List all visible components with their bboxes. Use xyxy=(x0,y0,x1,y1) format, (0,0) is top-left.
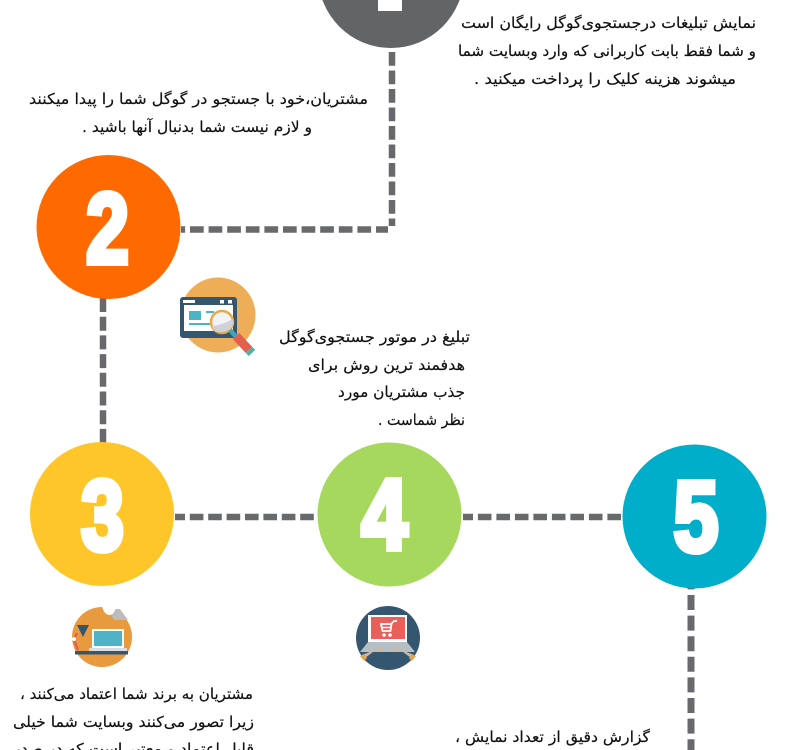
text: free ad display: میشوند هزینه کلیک را پرداخت میکنید . xyxy=(474,70,736,89)
step 4 circle: 4 xyxy=(362,459,408,571)
step 2 circle: 2 xyxy=(86,173,129,285)
text: brand trust xyxy=(12,685,254,750)
step 5 circle: 5 xyxy=(674,461,718,573)
text: brand trust: زیرا تصور می‌کنند وبسایت شما خیلی xyxy=(13,713,254,731)
text: smart ad targeting: هدفمند ترین روش برای xyxy=(308,356,465,374)
text: free ad display: و شما فقط بابت کاربرانی که وارد وبسایت شما xyxy=(458,42,756,60)
text: brand trust: مشتریان به برند شما اعتماد می‌کنند ، xyxy=(20,685,253,703)
step 1 circle xyxy=(318,0,464,48)
dashed connector: circle 3 to circle 4 xyxy=(175,514,318,520)
dashed connector: corner to circle 2 xyxy=(181,226,388,233)
dashed connector: circle 2 to circle 3 xyxy=(100,298,106,443)
text: free ad display xyxy=(458,14,756,89)
text: detailed report: گزارش دقیق از تعداد نمایش ، xyxy=(455,728,651,746)
text: smart ad targeting: نظر شماست . xyxy=(378,411,465,429)
text: free ad display: نمایش تبلیغات درجستجوی‌گوگل رایگان است xyxy=(461,14,756,32)
text: smart ad targeting xyxy=(279,328,470,429)
step 4 circle xyxy=(318,442,462,586)
step 3 circle xyxy=(30,442,174,586)
icon: browser with magnifier xyxy=(180,278,256,353)
step 5 circle xyxy=(622,444,766,588)
text: customers find you: مشتریان،خود با جستجو در گوگل شما را پیدا میکنند xyxy=(29,90,368,109)
text: smart ad targeting: جذب مشتریان مورد xyxy=(338,383,465,401)
dashed connector: circle 4 to circle 5 xyxy=(463,514,622,520)
icon: laptop on desk xyxy=(72,606,132,667)
step 2 circle xyxy=(36,155,180,299)
text: smart ad targeting: تبلیغ در موتور جستجوی‌گوگل xyxy=(279,328,470,346)
step 3 circle: 3 xyxy=(81,460,124,572)
dashed connector: circle 5 downward xyxy=(688,588,694,750)
icon: online shopping laptop xyxy=(356,606,420,670)
text: customers find you xyxy=(29,90,368,136)
text: customers find you: و لازم نیست شما بدنبال آنها باشید . xyxy=(82,118,312,136)
dashed connector: circle 1 down to the corner xyxy=(389,52,395,226)
